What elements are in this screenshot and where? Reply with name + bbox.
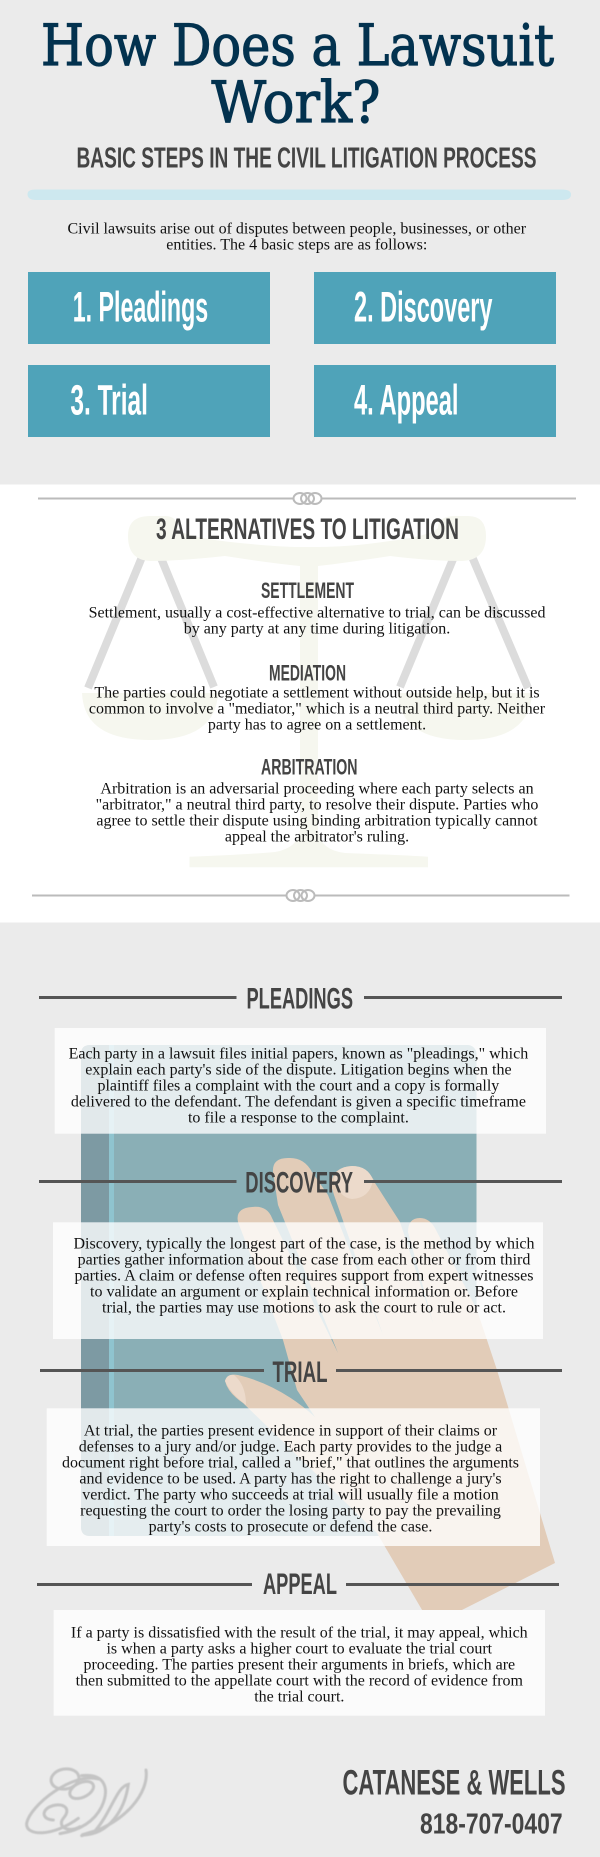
block: settlement — [89, 578, 545, 637]
text panel: trial: document right before trial, called a "brief," that outlines the arguments — [62, 1454, 519, 1471]
text panel: appeal: is when a party asks a higher court to evaluate the trial court — [106, 1640, 493, 1657]
block: arbitration: ARBITRATION — [261, 755, 358, 780]
text panel: discovery: parties gather information about the case from each other or from third — [78, 1251, 530, 1268]
block: mediation: The parties could negotiate a settlement without outside help, but it is — [94, 684, 540, 701]
text panel: appeal: then submitted to the appellate court with the record of evidence from — [76, 1672, 524, 1689]
text panel: trial: verdict. The party who succeeds at trial will usually file a motion — [82, 1486, 499, 1503]
text panel: trial: requesting the court to order the losing party to pay the prevailing — [80, 1502, 501, 1519]
text panel: pleadings: to file a response to the complaint. — [188, 1109, 409, 1126]
section: pleadings — [39, 982, 562, 1134]
block: arbitration — [96, 755, 538, 845]
block: arbitration: appeal the arbitrator's ruling. — [225, 828, 409, 845]
panel: header — [28, 13, 571, 437]
step 1 button: 1. Pleadings — [73, 284, 208, 332]
text panel: pleadings — [55, 1028, 546, 1134]
panel: alternatives to litigation — [0, 484, 600, 922]
heading: pleadings: PLEADINGS — [246, 982, 353, 1016]
illustration: hand on book — [81, 1045, 555, 1615]
heading: trial: TRIAL — [272, 1356, 328, 1389]
fingernails — [225, 1166, 373, 1405]
intro text: entities. The 4 basic steps are as follows: — [166, 236, 427, 254]
text panel: discovery — [53, 1222, 543, 1339]
section: appeal — [37, 1568, 559, 1716]
section: trial — [40, 1356, 562, 1546]
text panel: pleadings: explain each party's side of the dispute. Litigation begins when the — [85, 1061, 512, 1078]
block: arbitration: agree to settle their dispute using binding arbitration typically cannot — [96, 812, 538, 829]
text panel: trial: and evidence to be used. A party has the right to challenge a jury's — [79, 1470, 502, 1487]
text panel: trial: party's costs to prosecute or defend the case. — [149, 1518, 432, 1535]
block: settlement: by any party at any time during litigation. — [184, 620, 450, 637]
step buttons — [28, 272, 556, 437]
text panel: discovery: trial, the parties may use motions to ask the court to rule or act. — [102, 1299, 506, 1316]
intro text — [68, 220, 527, 254]
block: settlement: Settlement, usually a cost-effective alternative to trial, can be discussed — [89, 604, 545, 621]
heading: appeal: APPEAL — [263, 1568, 337, 1601]
text panel: discovery: Discovery, typically the longest part of the case, is the method by which — [73, 1235, 535, 1252]
text panel: trial — [47, 1408, 540, 1546]
top rule with rings — [38, 493, 576, 504]
block: arbitration: "arbitrator," a neutral third party, to resolve their dispute. Parties who — [96, 796, 538, 813]
step 4 button — [314, 365, 556, 437]
text panel: trial: defenses to a jury and/or judge. Each party provides to the judge a — [79, 1438, 502, 1455]
icon: scales of justice watermark — [82, 516, 532, 867]
title — [41, 13, 554, 136]
step 2 button: 2. Discovery — [354, 284, 493, 332]
block: mediation: common to involve a "mediator," which is a neutral third party. Neither — [89, 700, 546, 717]
text panel: appeal — [54, 1610, 545, 1716]
step 4 button: 4. Appeal — [354, 376, 458, 424]
block: mediation: party has to agree on a settlement. — [208, 716, 426, 733]
icon: book — [81, 1045, 476, 1536]
text panel: appeal: the trial court. — [254, 1688, 344, 1705]
text panel: discovery: parties. A claim or defense often requires support from expert witnesses — [75, 1267, 533, 1284]
text panel: appeal: proceeding. The parties present their arguments in briefs, which are — [83, 1656, 515, 1673]
text panel: pleadings: delivered to the defendant. The defendant is given a specific timeframe — [71, 1093, 526, 1110]
text panel: discovery: to validate an argument or explain technical information or. Before — [90, 1283, 518, 1300]
step 2 button — [314, 272, 556, 344]
section: discovery — [39, 1166, 562, 1339]
text panel: pleadings: Each party in a lawsuit files initial papers, known as "pleadings," which — [69, 1045, 528, 1062]
title: Work? — [212, 70, 380, 136]
footer: firm name and phone — [342, 1763, 566, 1840]
bottom rule with rings — [32, 890, 570, 901]
text panel: pleadings: plaintiff files a complaint with the court and a copy is formally — [97, 1077, 499, 1094]
icon: hand — [225, 1158, 555, 1615]
phone number: 818-707-0407 — [420, 1808, 563, 1840]
light blue divider bar — [28, 190, 571, 200]
text panel: trial: At trial, the parties present evidence in support of their claims or — [84, 1422, 498, 1439]
intro text: Civil lawsuits arise out of disputes between people, businesses, or other — [68, 220, 527, 237]
block: mediation — [89, 661, 546, 733]
block: mediation: MEDIATION — [269, 661, 346, 686]
block: settlement: SETTLEMENT — [261, 578, 354, 603]
text panel: appeal: If a party is dissatisfied with the result of the trial, it may appeal, which — [71, 1624, 528, 1641]
block: arbitration: Arbitration is an adversarial proceeding where each party selects an — [100, 780, 534, 797]
heading: discovery: DISCOVERY — [245, 1166, 353, 1199]
logo: CW monogram — [27, 1767, 146, 1836]
step 3 button: 3. Trial — [70, 376, 148, 424]
step 3 button — [28, 365, 270, 437]
step 1 button — [28, 272, 270, 344]
